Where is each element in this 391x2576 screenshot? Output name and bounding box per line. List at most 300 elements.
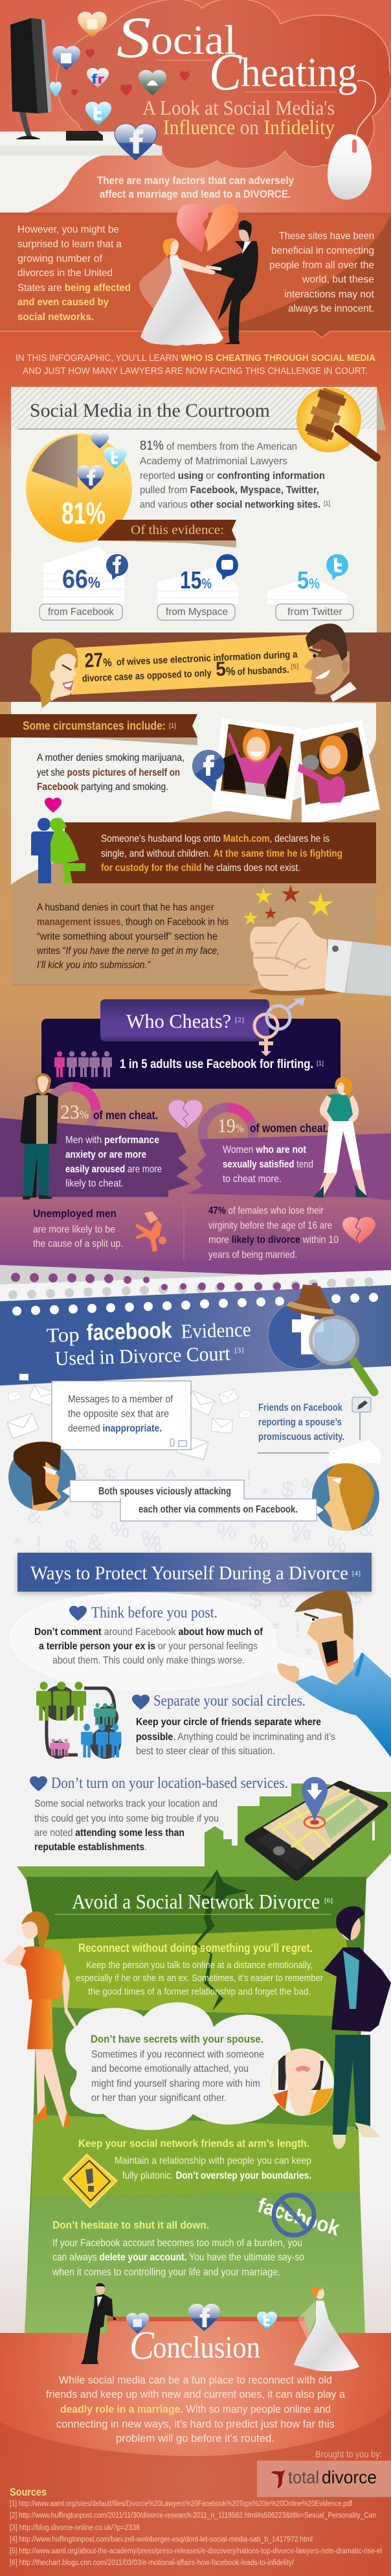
scattered symbols: * [260, 1483, 269, 1507]
speech bubble: spouses attacking [62, 1480, 324, 1521]
scattered symbols: & [27, 1503, 42, 1528]
text: right intro paragraph: world, but these [302, 274, 374, 285]
illustration: woman in white [313, 1077, 368, 1198]
illustration: angry wife head [30, 638, 78, 708]
band: top facebook evidence [0, 1273, 391, 1392]
icon: facebook magnifier detective [268, 1284, 374, 1392]
subsection: arm's length: fully plutonic. Don’t overstep your boundaries. [122, 2170, 311, 2181]
message box [52, 1381, 191, 1450]
stat text: divorce case as opposed to only [82, 667, 212, 684]
message box: Messages to a member of [68, 1394, 173, 1405]
title word: Cheating [209, 42, 357, 101]
intro text [97, 174, 294, 200]
text: husband anger paragraph: management issues, though on Facebook in his [37, 916, 229, 928]
ribbon: of this evidence [97, 520, 236, 548]
text: infographic intro caps: AND JUST HOW MANY LAWYERS ARE NOW FACING THIS CHALLENGE IN COURT. [23, 366, 368, 377]
crack [194, 1870, 248, 2011]
scattered symbols: $ [282, 1478, 294, 1502]
heading [129, 2324, 260, 2368]
scattered symbols: % [291, 1520, 311, 1544]
stat text: 1 in 5 adults use Facebook for flirting. [120, 1058, 313, 1071]
text: 47% of females: virginity before the age of 16 are [208, 1220, 332, 1231]
stat: 66% from facebook: 66% [62, 565, 100, 594]
text: left intro paragraph: surprised to learn that a [17, 238, 122, 250]
ribbon: some circumstances include: [1] [169, 723, 176, 730]
groom [207, 220, 258, 345]
section: conclusion [0, 2317, 391, 2576]
section: location based services: Some social networks track your location and [34, 1798, 218, 1809]
body text: deadly role in a marriage. With so many people online and [60, 2403, 331, 2415]
text: husband anger paragraph: A husband denies in court that he has anger [37, 902, 214, 913]
stat text: of husbands. [237, 664, 289, 678]
divider [183, 1203, 184, 1269]
hourglass green bands [25, 1877, 366, 2339]
text: women paragraph: Women who are not [223, 1144, 307, 1155]
illustration: smug husband head [304, 623, 357, 702]
scattered symbols: * [13, 1533, 21, 1557]
subsection: shut it all down: can always delete your account. You have the ultimate say-so [52, 2252, 304, 2263]
subsection: reconnect [76, 1942, 323, 1997]
cloud: don't have secrets [65, 2002, 291, 2130]
stat paragraph 81%: 81% of members from the American [140, 439, 297, 453]
subsection: arm's length: Keep your social network friends at arm’s length. [78, 2137, 309, 2150]
title text: Used in Divorce Court [54, 1342, 231, 1370]
text: left intro paragraph [17, 224, 131, 323]
section: separate social circles: Keep your circle of friends separate where [136, 1717, 321, 1728]
body text: friends and keep up with new and current ones, it can also play a [46, 2388, 346, 2400]
stat text: 27% [84, 648, 112, 672]
subsection: reconnect: Keep the person you talk to online at a distance emotionally, [86, 1960, 313, 1971]
cloud behind title [56, 0, 391, 168]
subsection: shut it all down [52, 2219, 304, 2278]
title word: Cheating: heating [241, 49, 357, 95]
section: separate social circles: best to steer clear of this situation. [136, 1746, 275, 1757]
speech ellipse: think before you post [10, 1593, 330, 1690]
stat: men cheat [60, 1100, 158, 1123]
title word: Cheating: C [209, 42, 242, 101]
section: location based services: reputable establishments. [34, 1842, 147, 1853]
text: mother: Facebook partying and smoking. [37, 782, 168, 793]
stat: women cheat [218, 1114, 329, 1137]
icon: facebook bubble [192, 750, 225, 792]
title word: Social: S [117, 6, 151, 70]
section: location based services: are noted attending some less than [34, 1828, 184, 1839]
speech ellipse: think before you post: Don’t comment around Facebook about how much of [34, 1627, 263, 1638]
stat text: of wives use electronic information during a [116, 649, 298, 668]
text: friends on facebook: promiscuous activity. [258, 1432, 344, 1443]
text: friends on facebook: Friends on Facebook [258, 1402, 342, 1413]
icon: myspace heart [126, 2313, 149, 2334]
stars [255, 887, 272, 903]
gradient body background [0, 331, 391, 1303]
subtitle: Influence on Infidelity [163, 115, 335, 139]
text: 47% of females: years of being married. [208, 1249, 297, 1260]
section heading: ways to protect: Ways to Protect Yourself During a Divorce [30, 1562, 348, 1584]
title text: Top [46, 1323, 80, 1347]
stat text [81, 640, 299, 686]
scattered symbols: * [223, 1594, 232, 1619]
heading: onclusion [153, 2330, 260, 2365]
stat: women cheat: 19% [218, 1114, 244, 1137]
message box: the opposite sex that are [68, 1409, 169, 1419]
text: mother: yet she posts pictures of herself on [37, 767, 180, 778]
scattered symbols: & [269, 1646, 284, 1671]
scattered symbols: & [359, 1516, 374, 1541]
text: right intro paragraph: always be innocent. [288, 303, 374, 314]
text: 47% of females: 47% of females who lose their [208, 1205, 324, 1216]
box: match.com husband: Someone’s husband logs onto Match.com, declares he is [101, 833, 330, 844]
subtitle [142, 96, 335, 139]
sources: [3] http://blog.divorce-online.co.uk/?p=2338 [10, 2524, 140, 2532]
icon: broken heart [177, 204, 238, 253]
box: match.com husband: for custody for the child he claims does not exist. [101, 863, 300, 874]
text: unemployed men: are more likely to be [33, 1224, 115, 1235]
sources: Sources [10, 2486, 47, 2498]
ribbon: some circumstances include [0, 714, 197, 745]
stat: 15% from myspace [157, 554, 238, 620]
text: left intro paragraph: growing number of [17, 253, 103, 264]
ribbon band grey [0, 1265, 259, 1286]
scattered symbols: $ [104, 1465, 116, 1489]
scattered symbols: % [142, 1533, 162, 1557]
logo: total divorce: total [288, 2467, 319, 2487]
subsection: reconnect: the good times of a former relationship and forget the bad. [88, 1986, 311, 1997]
text: men paragraph [65, 1135, 162, 1189]
icon: blogger heart [78, 12, 107, 38]
illustration: man in dark jacket [324, 1907, 391, 2149]
panel: some circumstances [0, 699, 380, 985]
section: separate social circles [132, 1693, 335, 1757]
scattered symbols: % [141, 1526, 161, 1551]
cloud: don't have secrets: or her than your significant other. [91, 2093, 227, 2104]
scattered symbols: * [291, 1531, 300, 1555]
text: husband anger paragraph: I’ll kick you into submission.” [37, 960, 151, 971]
speech ellipse: think before you post: a terrible person your ex is or your personal feelings [39, 1641, 258, 1652]
stat paragraph 81%: and various other social networking sites. [140, 499, 320, 511]
icon: digg heart [139, 70, 166, 95]
scattered symbols: & [74, 1459, 89, 1484]
section: location based services [30, 1775, 288, 1853]
title [117, 6, 357, 101]
subsection: shut it all down: Don’t hesitate to shut it all down. [52, 2219, 209, 2231]
purple zone bottom edge [0, 1260, 391, 1275]
subsection: reconnect: Reconnect without doing something you’ll regret. [78, 1942, 313, 1955]
title word: Social [117, 6, 236, 70]
polaroid photo 2 [298, 720, 380, 826]
scattered symbols: & [243, 1614, 258, 1638]
text: friends on facebook [258, 1397, 381, 1463]
text: husband anger paragraph [36, 902, 229, 971]
message box: deemed inappropriate. [68, 1423, 162, 1434]
bride [140, 238, 223, 345]
scattered symbols: & [278, 1588, 293, 1612]
panel: who cheats header: [1] [317, 1060, 324, 1067]
panel: avoid a social network divorce: [6] [324, 1897, 333, 1905]
heading: Who Cheats? [126, 1010, 231, 1032]
section: divorce intro [0, 213, 391, 338]
box: match.com husband: single, and without children. At the same time he is fighting [101, 848, 342, 859]
scattered symbols: % [301, 1474, 320, 1499]
subsection: shut it all down: when it comes to controlling your life and your marriage. [52, 2267, 280, 2278]
subsection: reconnect: especially if he or she is an ex. Sometimes, it’s easier to remember [76, 1973, 323, 1984]
text: women paragraph [223, 1144, 313, 1185]
illustration: woman face [312, 1462, 379, 1533]
scattered symbols: ^ [166, 1466, 176, 1491]
scattered symbols: & [87, 1531, 102, 1555]
polaroid photo 1 [212, 718, 301, 820]
icon: pen button [352, 1397, 371, 1412]
stat: 5% from twitter [267, 554, 353, 620]
subsection: arm's length: Maintain a relationship with people you can keep [115, 2155, 311, 2166]
title word: Social: ocial [151, 17, 236, 63]
desk and monitor [0, 18, 162, 219]
stat: men cheat: of men cheat. [93, 1109, 158, 1122]
stat: 15% from myspace: 15% [180, 567, 212, 594]
icon: twitter heart [85, 102, 111, 125]
dotted rows [11, 1273, 150, 1284]
icon: twitter heart on pie [104, 447, 127, 469]
section: location based services: Don’t turn on your location-based services. [51, 1775, 288, 1792]
scattered symbols: ! [36, 1533, 41, 1557]
subtitle: A Look at Social Media's [142, 96, 335, 119]
cloud: don't have secrets: and become emotionally attached, you [91, 2063, 249, 2074]
icon: five people [54, 1051, 112, 1077]
keyboard [66, 131, 103, 141]
text: infographic intro caps: IN THIS INFOGRAPHIC, YOU’LL LEARN WHO IS CHEATING THROUGH SOCIAL MEDIA [16, 353, 375, 364]
illustration: small groom [81, 2283, 117, 2364]
scattered symbols: * [62, 1505, 71, 1529]
icon: flickr heart [87, 68, 109, 87]
scattered symbols: $ [194, 1588, 207, 1612]
scattered symbols: $ [91, 1498, 103, 1523]
title text: facebook [86, 1317, 173, 1345]
veil [139, 256, 181, 318]
hero background [0, 0, 391, 214]
heading: C [129, 2324, 155, 2368]
scattered symbols: * [194, 1515, 203, 1540]
cloud: don't have secrets: Sometimes if you reconnect with someone [91, 2049, 264, 2060]
text: 47% of females [208, 1205, 339, 1260]
yellow banner [71, 634, 317, 695]
section heading: ways to protect: [4] [352, 1570, 361, 1577]
panel: avoid a social network divorce [17, 1783, 391, 2339]
speech bubble: spouses attacking: each other via comments on Facebook. [139, 1504, 298, 1515]
ribbon band white [0, 1270, 391, 1303]
text: unemployed men [33, 1207, 123, 1249]
body text [46, 2374, 346, 2444]
illustration: bride and groom [139, 220, 258, 345]
pie chart 81%: 81% [61, 496, 106, 530]
icon: red broken heart [342, 1217, 375, 1244]
speech ellipse: think before you post: Think before you post. [91, 1605, 218, 1621]
pie chart 81% [26, 434, 132, 542]
stat: 66% from facebook [39, 546, 128, 620]
text: left intro paragraph: divorces in the United [17, 268, 113, 279]
title text: Evidence [181, 1318, 251, 1343]
body text: connecting in new ways, it’s hard to predict just how far this [56, 2418, 335, 2430]
illustration: phone with map [249, 1777, 383, 1876]
cloud: don't have secrets: Don’t have secrets with your spouse. [91, 2033, 263, 2045]
subsection: arm's length [78, 2137, 311, 2181]
stat: 66% from facebook: from Facebook [48, 607, 115, 618]
text: husband anger paragraph: writes “If you have the nerve to get in my face, [36, 946, 219, 957]
scattered symbols: $ [249, 1588, 262, 1612]
women donut [203, 1108, 253, 1158]
heading: Social Media in the Courtroom [30, 400, 270, 421]
section: location based services: this could get you into some big trouble if you [34, 1813, 219, 1824]
illustration: man face [8, 1441, 76, 1511]
logo: total divorce: divorce [322, 2467, 377, 2487]
illustration: woman in orange dress [3, 1911, 76, 2127]
box: match.com husband [65, 822, 376, 883]
text: husband anger paragraph: “write something about yourself” section he [37, 931, 218, 942]
social media hearts [50, 12, 190, 160]
scattered symbols: ( [124, 1461, 132, 1486]
zigzag [26, 1866, 366, 1877]
scattered symbols: * [249, 1516, 258, 1541]
desk [0, 132, 162, 209]
stat paragraph 81% [140, 439, 330, 511]
text: men paragraph: easily aroused are more [65, 1164, 162, 1175]
monitor stand [17, 55, 32, 137]
scattered symbols: * [272, 1617, 280, 1642]
small red hearts [71, 49, 190, 96]
scattered symbols: % [217, 1520, 236, 1544]
body text: problem will go before it’s routed. [116, 2432, 274, 2444]
icon: facebook heart [188, 2304, 220, 2331]
text: 47% of females: more likely to divorce within 10 [208, 1235, 339, 1246]
stat paragraph 81%: pulled from Facebook, Myspace, Twitter, [140, 485, 319, 496]
illustration: small bride [294, 2287, 359, 2371]
heading: Avoid a Social Network Divorce [72, 1890, 320, 1913]
text: men paragraph: likely to cheat. [65, 1178, 124, 1189]
sources [10, 2486, 382, 2567]
ribbon: of this evidence: Of this evidence: [131, 523, 224, 537]
stat paragraph 81%: reported using or confronting information [140, 470, 325, 482]
scattered symbols: % [327, 1533, 346, 1557]
text: right intro paragraph: These sites have been [279, 231, 374, 242]
icon: twitter heart [257, 2312, 277, 2330]
icon: gavel [296, 386, 377, 458]
icon: couple figures with heart [31, 798, 85, 883]
text: mother [37, 752, 184, 793]
icon: heart [69, 1606, 87, 1621]
logo: total divorce [257, 2461, 391, 2497]
scattered symbols: $ [65, 1536, 77, 1561]
scattered symbols: % [249, 1531, 269, 1555]
icon: warning sign [63, 2155, 117, 2207]
speech ellipse: think before you post: about them. This could only make things worse. [52, 1655, 245, 1666]
text: men paragraph: anxiety or are more [65, 1150, 146, 1160]
scattered symbols: $ [350, 1584, 362, 1609]
text: unemployed men: Unemployed men [33, 1207, 117, 1220]
text: right intro paragraph [269, 231, 375, 314]
text: left intro paragraph: social networks. [17, 312, 94, 323]
stat text: 5% [216, 657, 236, 680]
stat paragraph 81%: Academy of Matrimonial Lawyers [140, 456, 287, 467]
scattered symbols: * [162, 1516, 170, 1541]
section: separate social circles: possible. Anything could be incriminating and it’s [136, 1732, 335, 1743]
sources: [4] http://www.huffingtonpost.com/bari-zell-weinberger-esq/dont-let-social-media-sab_b_1417972.html [10, 2536, 313, 2544]
icon: no facebook: facebook [255, 2193, 342, 2240]
text: right intro paragraph: beneficial in connecting [271, 245, 374, 257]
icon: gender symbols [254, 997, 305, 1056]
icon: fist with stars [11, 885, 391, 996]
monitor body [10, 18, 51, 113]
icon: social circles people [36, 1682, 121, 1759]
text: friends on facebook: reporting a spouse’s [258, 1417, 342, 1428]
panel: men polygon [0, 1118, 190, 1197]
text: right intro paragraph: interactions may not [284, 289, 375, 300]
title text [46, 1316, 252, 1370]
stat: 5% from twitter: from Twitter [287, 607, 343, 618]
intro text: affect a marriage and lead to a DIVORCE. [100, 188, 291, 200]
text: unemployed men: the cause of a split up. [33, 1238, 123, 1249]
scattered symbols [13, 1459, 374, 1671]
icon: falling man [135, 1211, 166, 1252]
icon: myspace heart [52, 46, 80, 70]
panel: who cheats header: [2] [235, 1016, 244, 1024]
subsection: shut it all down: If your Facebook account becomes too much of a burden, you [52, 2238, 302, 2249]
band: 27% stat [0, 623, 391, 708]
scattered symbols: * [204, 1465, 212, 1489]
icon: attachment and camera [170, 1439, 174, 1446]
stat: men cheat: 23% [60, 1100, 89, 1123]
icon: skype heart [50, 82, 61, 97]
text: mother: A mother denies smoking marijuana, [37, 752, 184, 763]
illustration: bearded man [20, 1074, 58, 1200]
text: men paragraph: Men with performance [65, 1135, 159, 1146]
stat: women cheat: of women cheat. [250, 1122, 329, 1135]
text: infographic intro caps [16, 353, 375, 377]
scattered symbols: ! [295, 1617, 300, 1642]
icon: mouse with cable [328, 80, 375, 200]
panel: social media in the courtroom [11, 386, 386, 632]
intro text: There are many factors that can adversely [97, 174, 294, 187]
text: women paragraph: sexually satisfied tend [223, 1159, 313, 1170]
panel: women polygon [187, 1133, 391, 1200]
text: women paragraph: to cheat more. [223, 1174, 282, 1185]
panel: who cheats header [41, 997, 341, 1089]
section heading: ways to protect [17, 1553, 372, 1592]
illustration: angry man [277, 1590, 391, 1758]
scattered symbols: ! [246, 1466, 252, 1491]
icon: facebook heart on pie [77, 465, 104, 490]
ribbon: some circumstances include: Some circumstances include: [23, 719, 166, 732]
title text: [3] [234, 1347, 244, 1354]
stat: 5% from twitter: 5% [297, 567, 320, 594]
text: right intro paragraph: people from all over the [269, 260, 374, 271]
bottom page background [0, 1270, 391, 2339]
icon: pink broken heart [168, 1100, 203, 1129]
men donut [49, 1087, 96, 1133]
scattered symbols: % [110, 1518, 129, 1542]
icon: myspace heart on pie [91, 433, 109, 448]
text: left intro paragraph: States are being affected [17, 283, 131, 294]
speech bubble: spouses attacking: Both spouses viciously attacking [98, 1486, 231, 1497]
icon: shh woman circle [271, 2048, 334, 2117]
stat: 15% from myspace: from Myspace [166, 607, 228, 618]
text: left intro paragraph: However, you might be [17, 224, 119, 235]
icon: paper stack [329, 1440, 381, 1463]
body text: While social media can be a fun place to reconnect with old [59, 2374, 332, 2386]
text: left intro paragraph: and even caused by [17, 297, 109, 308]
icon: facebook heart [115, 124, 157, 160]
sources: [6] http://thechart.blogs.cnn.com/2011/03/03/e-motional-affairs-how-facebook-leads-to-infidelity/ [10, 2559, 295, 2567]
section: separate social circles: Separate your social circles. [153, 1693, 306, 1710]
scattered symbols: * [304, 1643, 313, 1667]
cloud: don't have secrets: might find yourself sharing more with him [91, 2078, 260, 2089]
